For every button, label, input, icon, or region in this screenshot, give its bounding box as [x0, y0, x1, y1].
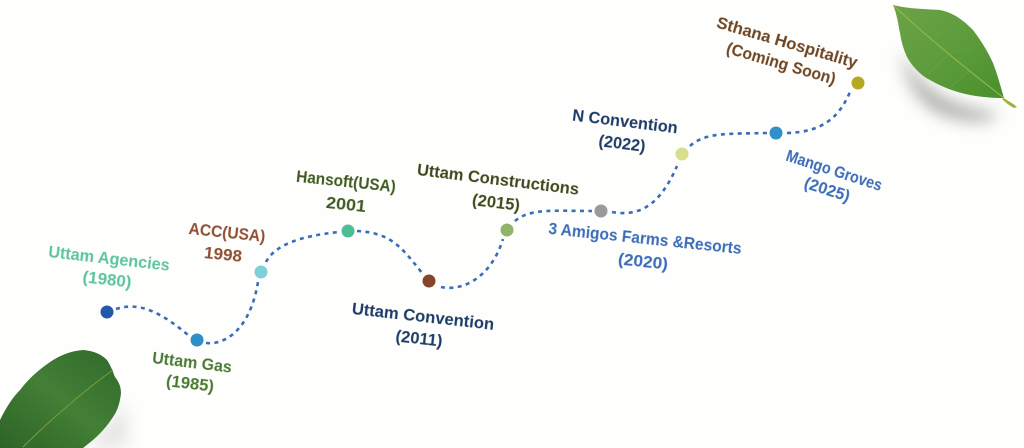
label: N Convention: N Convention — [571, 107, 679, 137]
label: N Convention — [571, 107, 679, 156]
label: Uttam Constructions: (2015) — [471, 191, 521, 215]
label: ACC(USA) — [188, 220, 266, 266]
icon: leaf bottom left — [0, 350, 128, 448]
label: N Convention: (2022) — [598, 132, 646, 156]
node: Sthana Hospitality — [852, 76, 864, 90]
node: ACC(USA) — [254, 266, 268, 278]
label: Sthana Hospitality: Sthana Hospitality — [714, 14, 860, 72]
label: 3 Amigos Farms & Resorts: (2020) — [617, 250, 669, 274]
node: Uttam Gas — [190, 334, 204, 346]
label: ACC(USA): 1998 — [203, 244, 243, 266]
label: Uttam Gas: Uttam Gas — [151, 349, 233, 377]
node: Uttam Convention — [422, 274, 436, 288]
label: 3 Amigos Farms & Resorts: 3 Amigos Farms &Resorts — [548, 220, 742, 258]
label: Uttam Convention: Uttam Convention — [351, 300, 495, 334]
node: 3 Amigos Farms & Resorts — [594, 204, 608, 218]
node: N Convention — [676, 148, 688, 160]
node: Uttam Constructions — [500, 224, 514, 236]
label: Uttam Agencies — [47, 243, 171, 292]
label: Uttam Convention — [351, 300, 495, 351]
label: Uttam Agencies: (1980) — [82, 268, 132, 292]
node: Mango Groves — [770, 126, 782, 140]
label: Uttam Agencies: Uttam Agencies — [47, 243, 171, 275]
icon: leaf top right — [893, 5, 1017, 121]
label: Hansoft(USA): 2001 — [325, 194, 367, 216]
label: Sthana Hospitality: (Coming Soon) — [724, 40, 838, 88]
node: Uttam Agencies — [100, 306, 114, 318]
label: Mango Groves: Mango Groves — [784, 147, 884, 195]
label: Mango Groves: (2025) — [802, 174, 852, 206]
dotted timeline path — [116, 92, 850, 343]
node: Hansoft(USA) — [342, 224, 354, 238]
label: Hansoft(USA): Hansoft(USA) — [295, 168, 397, 196]
label: Uttam Gas: (1985) — [165, 372, 215, 396]
label: Uttam Gas — [151, 349, 233, 396]
label: Uttam Convention: (2011) — [395, 327, 443, 351]
label: ACC(USA): ACC(USA) — [188, 220, 266, 246]
label: Uttam Constructions: Uttam Constructions — [416, 161, 580, 199]
label: Hansoft(USA) — [295, 168, 397, 216]
